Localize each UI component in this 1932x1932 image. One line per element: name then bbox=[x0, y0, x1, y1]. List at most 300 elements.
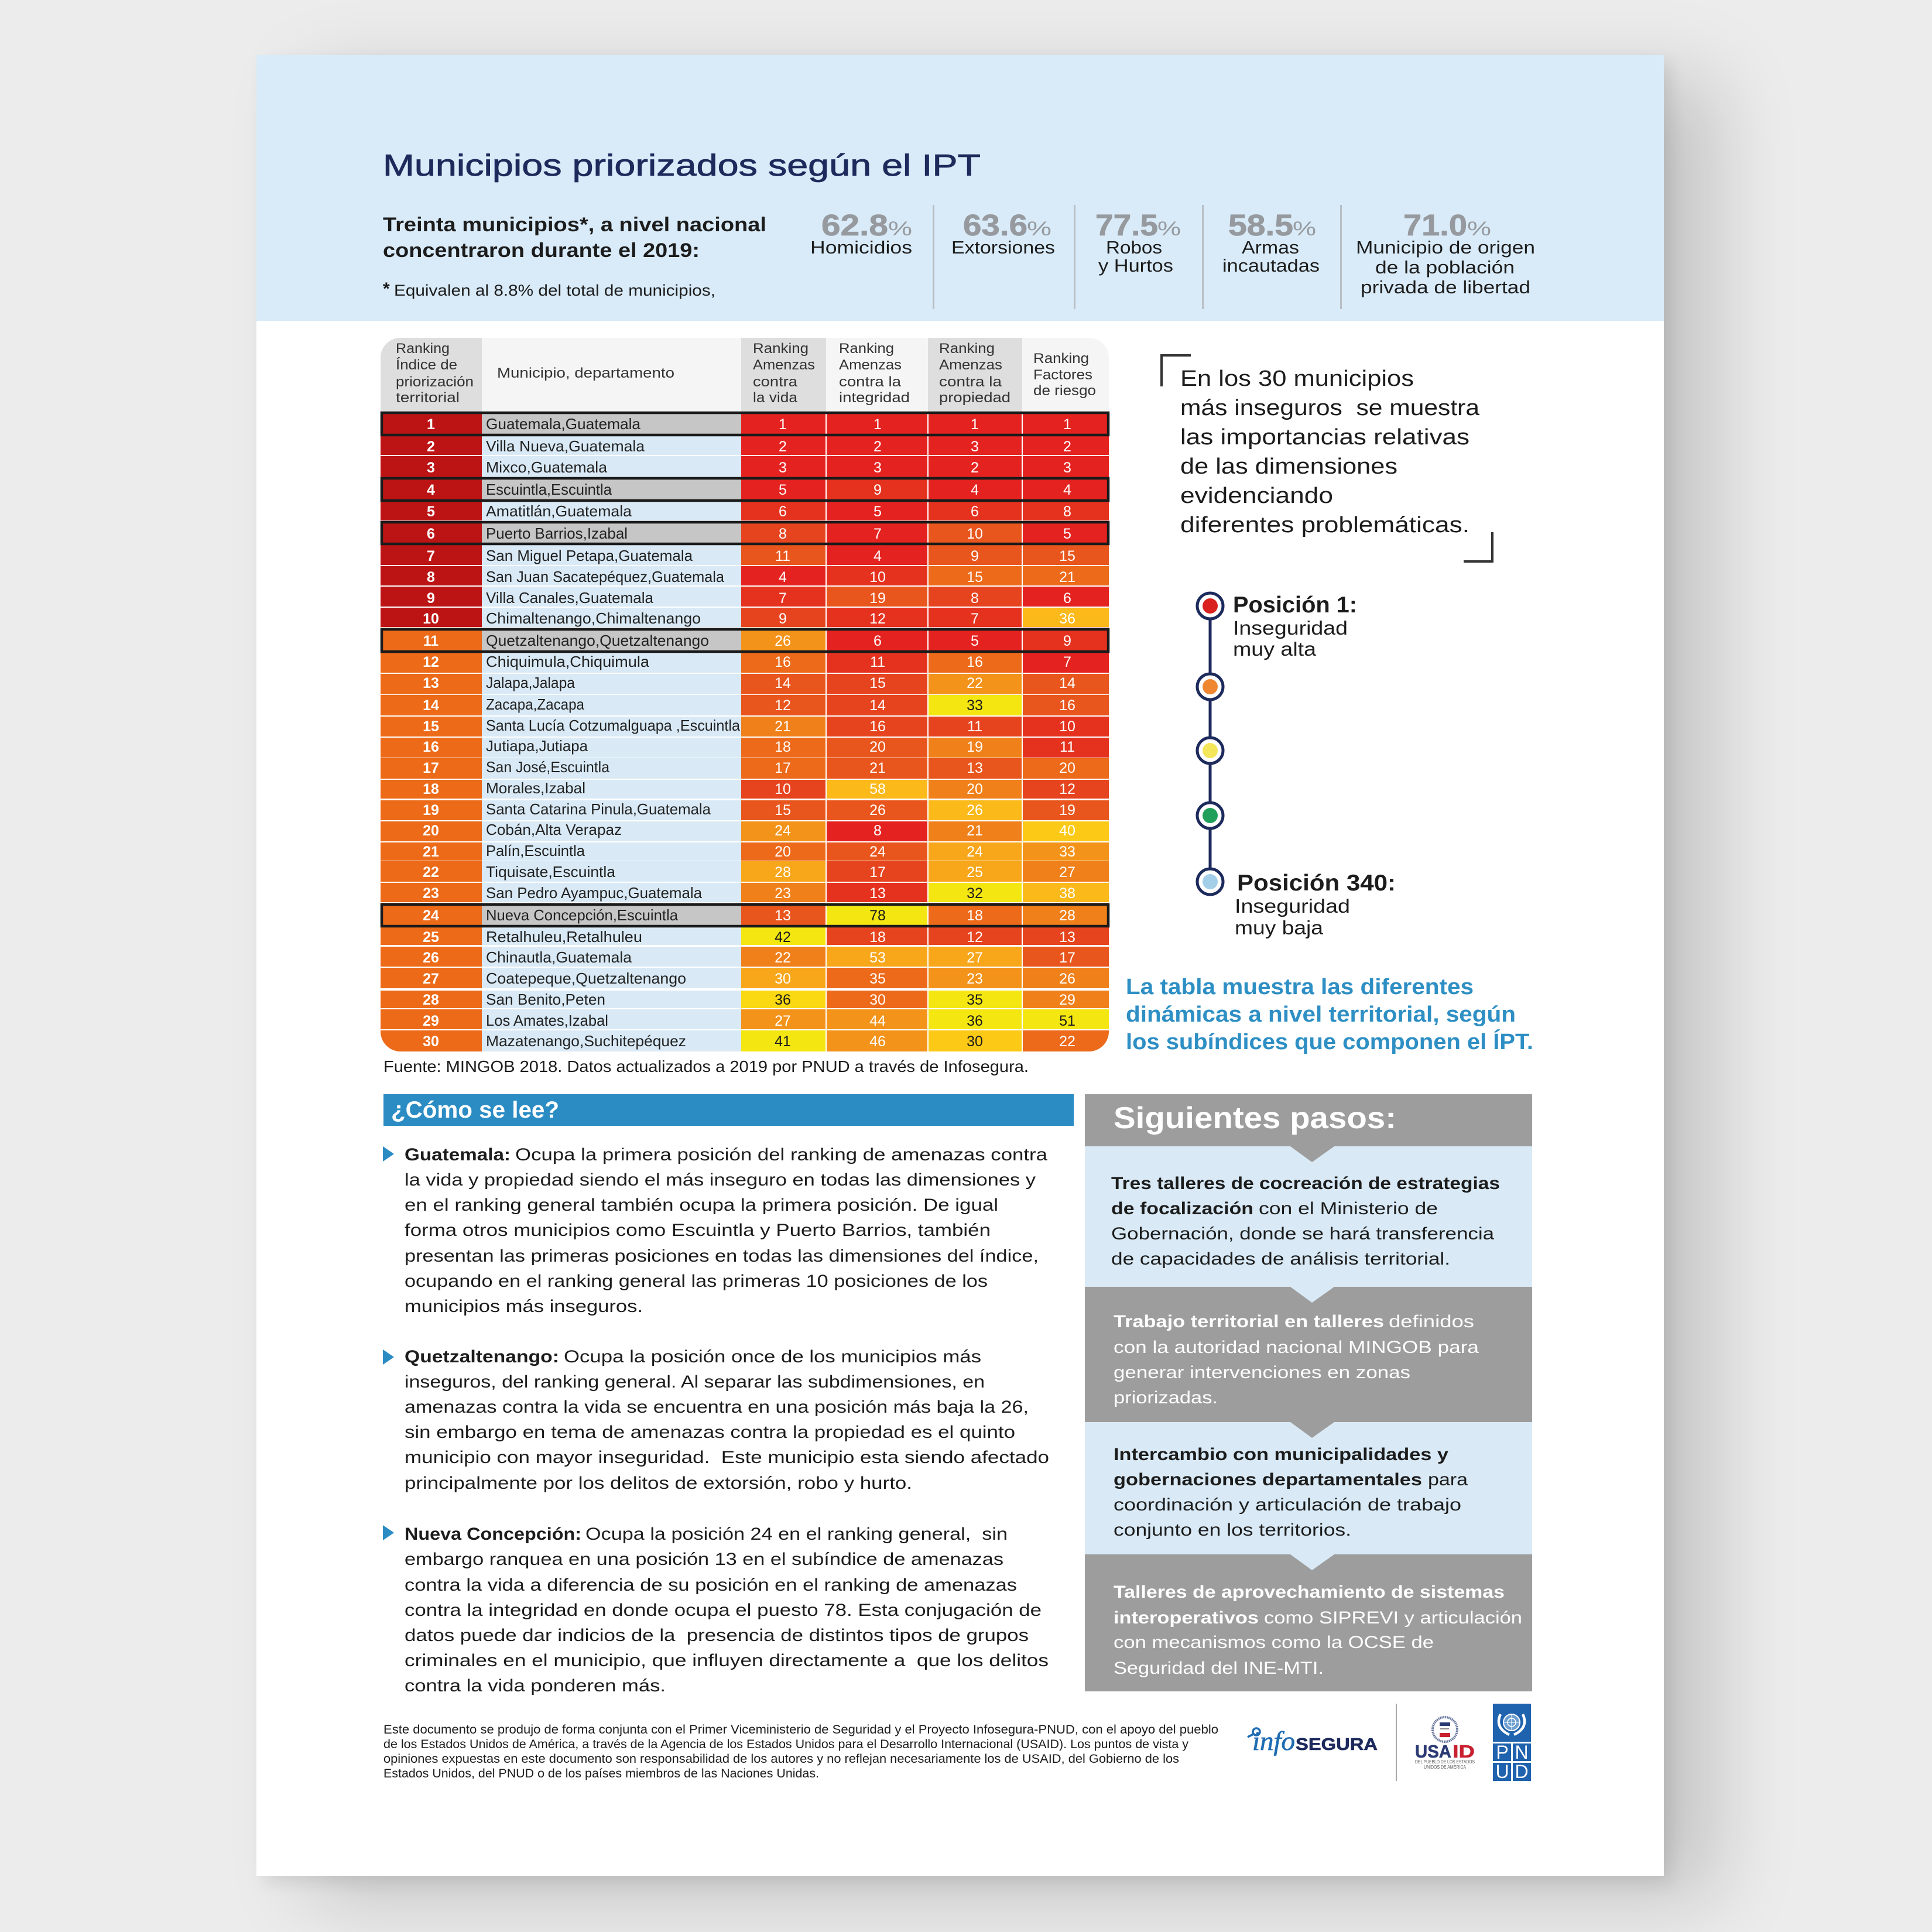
row 26: 17 bbox=[1059, 950, 1075, 966]
stat: armas incautadas: Armas bbox=[1242, 237, 1299, 258]
header panel bbox=[256, 55, 1664, 321]
row 9 bbox=[381, 587, 1109, 607]
row 24: 24 bbox=[423, 907, 439, 924]
intro text: Equivalen al 8.8% del total de municipios, bbox=[394, 282, 715, 299]
marker: green bbox=[1197, 803, 1223, 828]
row 24: 78 bbox=[869, 907, 886, 924]
item: Guatemala: ocupando en el ranking general las primeras 10 posiciones de los bbox=[405, 1272, 988, 1291]
row 15: 15 bbox=[423, 718, 439, 735]
stat: robos y hurtos: y Hurtos bbox=[1098, 255, 1173, 276]
step 1: de capacidades de análisis territorial. bbox=[1111, 1249, 1450, 1269]
item: Nueva Concepcion: Ocupa la posición 24 en el ranking general, sin bbox=[585, 1525, 1008, 1544]
row 12 bbox=[381, 652, 1109, 673]
row 30: 22 bbox=[1059, 1033, 1075, 1050]
row 17 bbox=[381, 758, 1109, 779]
row 21: 33 bbox=[1059, 844, 1075, 860]
row 7: 7 bbox=[427, 548, 435, 564]
title: Municipios priorizados según el IPT bbox=[383, 149, 981, 183]
row 6: 7 bbox=[873, 526, 882, 542]
row 25 bbox=[381, 927, 1109, 946]
row 10 bbox=[381, 608, 1109, 627]
row 29: 29 bbox=[423, 1013, 439, 1029]
row 2: 3 bbox=[971, 439, 979, 455]
note with brackets: las importancias relativas bbox=[1180, 425, 1469, 450]
row 13: 13 bbox=[423, 675, 439, 691]
logo: usaid bbox=[1415, 1717, 1475, 1770]
row 10: 10 bbox=[423, 611, 439, 627]
item: Nueva Concepcion: embargo ranquea en una posición 13 en el subíndice de amenazas bbox=[405, 1550, 1003, 1569]
blue callout: La tabla muestra las diferentes bbox=[1126, 975, 1474, 999]
stat: municipio de origen bbox=[1356, 208, 1535, 297]
item: Guatemala: la vida y propiedad siendo el más inseguro en todas las dimensiones y bbox=[405, 1170, 1036, 1190]
row 15: 11 bbox=[967, 718, 982, 735]
row 26: Chinautla,Guatemala bbox=[486, 948, 632, 966]
row 4: 4 bbox=[1063, 482, 1071, 498]
row 17: 17 bbox=[423, 760, 439, 776]
stat: extorsiones: 63.6 bbox=[963, 208, 1027, 242]
step 3: Intercambio con municipalidades y bbox=[1114, 1445, 1448, 1464]
item: Nueva Concepcion: criminales en el municipio, que influyen directamente a que los delitos bbox=[405, 1651, 1049, 1670]
row 29: 44 bbox=[869, 1013, 886, 1029]
item: Quetzaltenango: principalmente por los delitos de extorsión, robo y hurto. bbox=[405, 1474, 912, 1493]
table header: la vida bbox=[753, 390, 798, 406]
row 18: 58 bbox=[869, 781, 886, 797]
row 19: 19 bbox=[1059, 802, 1075, 818]
note with brackets: más inseguros se muestra bbox=[1180, 396, 1480, 420]
row 10: 9 bbox=[779, 611, 787, 627]
row 12: 7 bbox=[1063, 654, 1071, 670]
row 21: 24 bbox=[869, 844, 886, 860]
row 20: 8 bbox=[873, 823, 882, 839]
stat: armas incautadas: 58.5 bbox=[1228, 208, 1293, 242]
step 4: como SIPREVI y articulación bbox=[1264, 1608, 1522, 1628]
row 18: 18 bbox=[423, 781, 439, 797]
row 15 bbox=[381, 717, 1109, 737]
label: position 340 bbox=[1235, 871, 1396, 938]
step 3 bbox=[1085, 1422, 1532, 1554]
row 26: 53 bbox=[869, 950, 886, 966]
table header: propiedad bbox=[939, 390, 1010, 406]
row 2 bbox=[381, 436, 1109, 455]
intro text bbox=[383, 214, 766, 299]
row 27: 26 bbox=[1059, 971, 1075, 987]
row 11: 6 bbox=[873, 633, 882, 649]
step 4: con mecanismos como la OCSE de bbox=[1114, 1633, 1434, 1652]
item: Quetzaltenango: inseguros, del ranking general. Al separar las subdimensiones, en bbox=[405, 1372, 985, 1392]
row 28: 36 bbox=[775, 992, 791, 1008]
note with brackets: evidenciando bbox=[1180, 484, 1333, 508]
label: position 340: Posición 340: bbox=[1237, 871, 1396, 896]
step 4: Talleres de aprovechamiento de sistemas bbox=[1114, 1582, 1505, 1602]
row 26 bbox=[381, 947, 1109, 967]
row 24: Nueva Concepción,Escuintla bbox=[486, 906, 679, 924]
table header: Ranking bbox=[396, 341, 450, 357]
row 23: 32 bbox=[967, 885, 983, 902]
row 1 bbox=[383, 414, 1107, 434]
row 2: 2 bbox=[427, 439, 435, 455]
row 9: 19 bbox=[869, 590, 886, 607]
logo: pnud: P bbox=[1496, 1742, 1509, 1763]
step 1 bbox=[1085, 1146, 1532, 1287]
step 2: con la autoridad nacional MINGOB para bbox=[1114, 1338, 1479, 1357]
step 1: Gobernación, donde se hará transferencia bbox=[1111, 1224, 1494, 1244]
row 24: 13 bbox=[775, 907, 791, 924]
table header: contra la bbox=[839, 374, 902, 390]
row 25: Retalhuleu,Retalhuleu bbox=[486, 928, 642, 946]
row 5: 5 bbox=[427, 503, 435, 520]
step 4: Seguridad del INE-MTI. bbox=[1114, 1659, 1324, 1678]
step 2: Trabajo territorial en talleres bbox=[1114, 1312, 1384, 1331]
row 20: 21 bbox=[967, 823, 983, 839]
row 23 bbox=[381, 883, 1109, 902]
row 11: 5 bbox=[971, 633, 979, 649]
table header: Ranking bbox=[753, 341, 809, 357]
table header: Amenzas bbox=[839, 357, 902, 373]
panel: como se lee bbox=[383, 1094, 1074, 1695]
row 22 bbox=[381, 861, 1109, 882]
row 5: Amatitlán,Guatemala bbox=[486, 502, 632, 520]
item: Quetzaltenango: Quetzaltenango: bbox=[405, 1347, 559, 1366]
row 30: Mazatenango,Suchitepéquez bbox=[486, 1032, 686, 1050]
row 15: 21 bbox=[775, 718, 791, 735]
item: Quetzaltenango: Ocupa la posición once de los municipios más bbox=[564, 1347, 981, 1366]
row 8: 8 bbox=[427, 569, 435, 585]
step 2: generar intervenciones en zonas bbox=[1114, 1363, 1410, 1382]
row 17: 21 bbox=[869, 760, 886, 776]
label: position 340: Inseguridad bbox=[1235, 895, 1350, 917]
row 28: 35 bbox=[967, 992, 983, 1008]
row 22: 28 bbox=[775, 864, 791, 881]
row 27 bbox=[381, 968, 1109, 988]
row 17: San José,Escuintla bbox=[486, 758, 610, 776]
row 12: 11 bbox=[870, 654, 885, 670]
row 16: Jutiapa,Jutiapa bbox=[486, 737, 588, 755]
row 26: 22 bbox=[775, 950, 791, 966]
item: Guatemala bbox=[383, 1145, 1047, 1316]
table header: contra bbox=[753, 374, 798, 390]
row 7: 11 bbox=[775, 548, 790, 564]
row 5: 6 bbox=[779, 503, 787, 520]
row 9: 9 bbox=[427, 590, 435, 607]
item: Guatemala: presentan las primeras posiciones en todas las dimensiones del índice, bbox=[405, 1246, 1039, 1266]
logo: pnud bbox=[1493, 1704, 1531, 1782]
row 10: 12 bbox=[869, 611, 886, 627]
row 1: 1 bbox=[427, 416, 435, 433]
item: Nueva Concepcion: Nueva Concepción: bbox=[405, 1525, 581, 1544]
row 25: 13 bbox=[1059, 929, 1075, 946]
stat: robos y hurtos: 77.5 bbox=[1095, 208, 1158, 242]
heading bar: ¿Cómo se lee? bbox=[391, 1097, 559, 1123]
table header: Ranking bbox=[839, 341, 894, 357]
stat: municipio de origen: Municipio de origen bbox=[1356, 237, 1535, 258]
row 3 bbox=[381, 456, 1109, 478]
row 25: 18 bbox=[869, 929, 886, 946]
row 28: 30 bbox=[869, 992, 886, 1008]
heading: Siguientes pasos: bbox=[1114, 1101, 1396, 1135]
note with brackets: diferentes problemáticas. bbox=[1180, 513, 1469, 537]
row 29: 36 bbox=[967, 1013, 983, 1029]
step 3: para bbox=[1428, 1470, 1468, 1489]
label: position 1: Posición 1: bbox=[1233, 592, 1357, 618]
item: Guatemala: Guatemala: bbox=[405, 1145, 511, 1164]
row 20: 20 bbox=[423, 823, 439, 839]
page sheet bbox=[256, 55, 1664, 1876]
row 8: 15 bbox=[967, 569, 983, 585]
row 29: Los Amates,Izabal bbox=[486, 1012, 608, 1029]
row 28 bbox=[381, 991, 1109, 1008]
row 18 bbox=[381, 779, 1109, 799]
item: Quetzaltenango bbox=[383, 1347, 1049, 1493]
stat: robos y hurtos: Robos bbox=[1106, 237, 1162, 258]
row 29 bbox=[381, 1009, 1109, 1029]
row 13: 22 bbox=[967, 675, 983, 691]
row 21: 21 bbox=[423, 844, 439, 860]
row 22: 22 bbox=[423, 864, 439, 881]
logo: usaid: ID bbox=[1453, 1741, 1475, 1762]
row 11: Quetzaltenango,Quetzaltenango bbox=[486, 632, 709, 649]
logo: usaid: UNIDOS DE AMÉRICA bbox=[1424, 1765, 1467, 1770]
table header: Municipio, departamento bbox=[497, 365, 674, 381]
row 7 bbox=[381, 544, 1109, 565]
row 14 bbox=[381, 695, 1109, 715]
row 11: 26 bbox=[775, 633, 791, 649]
row 14: 16 bbox=[1059, 697, 1075, 714]
row 28: 28 bbox=[423, 992, 439, 1008]
row 8: San Juan Sacatepéquez,Guatemala bbox=[486, 568, 725, 585]
table header: Amenzas bbox=[753, 357, 815, 373]
row 2: 2 bbox=[873, 439, 882, 455]
row 24: 28 bbox=[1059, 907, 1075, 924]
note with brackets: de las dimensiones bbox=[1180, 454, 1397, 479]
row 15: Santa Lucía Cotzumalguapa ,Escuintla bbox=[486, 717, 741, 734]
legend scale bbox=[1197, 592, 1396, 938]
row 22: 27 bbox=[1059, 864, 1075, 881]
row 18: 10 bbox=[775, 781, 791, 797]
row 9: 7 bbox=[779, 590, 787, 607]
row 21: 24 bbox=[967, 844, 983, 860]
logo: usaid: USA bbox=[1415, 1741, 1451, 1762]
row 30: 30 bbox=[423, 1033, 439, 1050]
row 20: 24 bbox=[775, 823, 791, 839]
row 21: Palín,Escuintla bbox=[486, 842, 585, 859]
row 13: 14 bbox=[1059, 675, 1075, 691]
heading bar bbox=[383, 1094, 1074, 1126]
note with brackets: En los 30 municipios bbox=[1180, 366, 1414, 391]
row 3: 3 bbox=[427, 460, 435, 476]
stat: armas incautadas bbox=[1222, 208, 1320, 276]
table header: integridad bbox=[839, 390, 910, 406]
table header: Factores bbox=[1033, 367, 1092, 383]
table header: territorial bbox=[396, 390, 460, 406]
row 17: 17 bbox=[775, 760, 791, 776]
row 19 bbox=[381, 800, 1109, 820]
row 6: 5 bbox=[1063, 526, 1071, 542]
row 12: 16 bbox=[775, 654, 791, 670]
marker: position 1 red bbox=[1197, 593, 1223, 619]
row 7: 9 bbox=[971, 548, 979, 564]
table header: Índice de bbox=[396, 357, 457, 373]
label: position 340: muy baja bbox=[1235, 917, 1324, 938]
row 2: 2 bbox=[1063, 439, 1071, 455]
row 1: 1 bbox=[873, 416, 882, 433]
stat: homicidios bbox=[810, 208, 912, 258]
stat: armas incautadas: incautadas bbox=[1222, 255, 1320, 276]
row 13 bbox=[381, 674, 1109, 694]
row 22: Tiquisate,Escuintla bbox=[486, 863, 616, 881]
intro text: concentraron durante el 2019: bbox=[383, 239, 700, 262]
row 14: Zacapa,Zacapa bbox=[486, 696, 584, 713]
row 21: 20 bbox=[775, 844, 791, 860]
label: position 1: Inseguridad bbox=[1233, 617, 1348, 639]
note with brackets bbox=[1162, 355, 1492, 561]
row 24 bbox=[381, 903, 1109, 927]
intro text: Treinta municipios*, a nivel nacional bbox=[383, 214, 766, 236]
row 6: Puerto Barrios,Izabal bbox=[486, 525, 628, 542]
row 3: 2 bbox=[971, 460, 979, 476]
row 3: 3 bbox=[873, 460, 882, 476]
label: position 1 bbox=[1233, 592, 1357, 660]
stat: homicidios: Homicidios bbox=[810, 237, 912, 258]
logo: usaid: DEL PUEBLO DE LOS ESTADOS bbox=[1415, 1759, 1475, 1765]
row 23: 13 bbox=[869, 885, 886, 902]
row 6: 6 bbox=[427, 526, 435, 542]
disclaimer text: de los Estados Unidos de América, a través de la Agencia de los Estados Unidos para el Desarrollo Internacional (USAID). Los puntos de vista y bbox=[383, 1738, 1188, 1751]
stat: armas incautadas: % bbox=[1293, 218, 1316, 240]
row 16: 19 bbox=[967, 739, 983, 755]
item: Quetzaltenango: sin embargo en tema de amenazas contra la propiedad es el quinto bbox=[405, 1423, 1015, 1442]
row 8: 21 bbox=[1059, 569, 1075, 585]
row 30: 41 bbox=[775, 1033, 791, 1050]
row 8 bbox=[381, 566, 1109, 585]
row 27: 23 bbox=[967, 971, 983, 987]
item: Guatemala: forma otros municipios como Escuintla y Puerto Barrios, también bbox=[405, 1221, 991, 1240]
blue callout: dinámicas a nivel territorial, según bbox=[1126, 1002, 1516, 1027]
step 1: de focalización bbox=[1111, 1199, 1253, 1218]
item: Quetzaltenango: municipio con mayor inseguridad. Este municipio esta siendo afectado bbox=[405, 1448, 1049, 1467]
row 14: 12 bbox=[775, 697, 791, 714]
row 17: 13 bbox=[967, 760, 983, 776]
row 20: Cobán,Alta Verapaz bbox=[486, 821, 622, 838]
blue callout: los subíndices que componen el ÍPT. bbox=[1126, 1029, 1533, 1054]
row 19: 15 bbox=[775, 802, 791, 818]
item: Nueva Concepcion: contra la integridad en donde ocupa el puesto 78. Esta conjugación de bbox=[405, 1601, 1042, 1620]
row 23: 23 bbox=[775, 885, 791, 902]
stat: extorsiones: Extorsiones bbox=[951, 237, 1055, 258]
row 17: 20 bbox=[1059, 760, 1075, 776]
table header: Ranking bbox=[939, 341, 995, 357]
row 1: 1 bbox=[1063, 416, 1071, 433]
row 28: 29 bbox=[1059, 992, 1075, 1008]
row 16 bbox=[381, 737, 1109, 758]
row 29: 51 bbox=[1059, 1013, 1075, 1029]
item: Nueva Concepcion: contra la vida ponderen más. bbox=[405, 1676, 666, 1695]
row 11 bbox=[381, 628, 1109, 652]
row 9: 6 bbox=[1063, 590, 1071, 607]
row 4: 9 bbox=[873, 482, 882, 498]
row 27: Coatepeque,Quetzaltenango bbox=[486, 970, 686, 987]
table header bbox=[381, 338, 1109, 412]
disclaimer text: opiniones expuestas en este documento son responsabilidad de los autores y no reflejan necesariamente los de USAID, del Gobierno de los bbox=[383, 1752, 1179, 1766]
row 12: Chiquimula,Chiquimula bbox=[486, 653, 650, 670]
row 5 bbox=[381, 501, 1109, 520]
row 19: 19 bbox=[423, 802, 439, 818]
row 1: 1 bbox=[779, 416, 787, 433]
step 2 bbox=[1085, 1287, 1532, 1422]
row 25: 25 bbox=[423, 929, 439, 946]
row 8: 4 bbox=[779, 569, 787, 585]
step 3: gobernaciones departamentales bbox=[1114, 1470, 1422, 1489]
stat: municipio de origen: 71.0 bbox=[1403, 208, 1467, 242]
table rows and header bbox=[381, 338, 1109, 1051]
row 23: 38 bbox=[1059, 885, 1075, 902]
row 22: 25 bbox=[967, 864, 983, 881]
blue callout bbox=[1126, 975, 1533, 1054]
row 5: 6 bbox=[971, 503, 979, 520]
step 4 bbox=[1085, 1554, 1532, 1691]
stat: robos y hurtos bbox=[1095, 208, 1181, 276]
item: Nueva Concepcion bbox=[383, 1525, 1049, 1695]
row 6: 10 bbox=[967, 526, 983, 542]
item: Guatemala: Ocupa la primera posición del ranking de amenazas contra bbox=[515, 1145, 1047, 1164]
logo: infosegura: info bbox=[1252, 1726, 1295, 1756]
row 18: 12 bbox=[1059, 781, 1075, 797]
row 3: 3 bbox=[779, 460, 787, 476]
item: Guatemala: en el ranking general también ocupa la primera posición. De igual bbox=[405, 1195, 998, 1215]
row 25: 42 bbox=[775, 929, 791, 946]
row 15: 16 bbox=[869, 718, 886, 735]
logo: infosegura bbox=[1248, 1726, 1378, 1756]
row 4: 4 bbox=[971, 482, 979, 498]
row 4: 4 bbox=[427, 482, 435, 498]
row 7: 15 bbox=[1059, 548, 1075, 564]
stat: robos y hurtos: % bbox=[1157, 218, 1181, 240]
table header: Amenzas bbox=[939, 357, 1002, 373]
ranking table bbox=[381, 338, 1109, 1051]
row 30: 30 bbox=[967, 1033, 983, 1050]
row 30: 46 bbox=[869, 1033, 886, 1050]
row 3: 3 bbox=[1063, 460, 1071, 476]
row 16: 11 bbox=[1060, 739, 1075, 755]
row 11: 11 bbox=[423, 633, 439, 649]
heading bbox=[1085, 1094, 1532, 1146]
row 19: Santa Catarina Pinula,Guatemala bbox=[486, 800, 711, 818]
table source note: Fuente: MINGOB 2018. Datos actualizados a 2019 por PNUD a través de Infosegura. bbox=[383, 1057, 1029, 1075]
logo: pnud: N bbox=[1515, 1742, 1529, 1763]
row 26: 26 bbox=[423, 950, 439, 966]
row 5: 5 bbox=[873, 503, 882, 520]
logo: pnud: D bbox=[1515, 1761, 1529, 1782]
table header: de riesgo bbox=[1033, 383, 1096, 399]
step 3: conjunto en los territorios. bbox=[1114, 1520, 1351, 1540]
row 5: 8 bbox=[1063, 503, 1071, 520]
row 6: 8 bbox=[779, 526, 787, 542]
highlighted row outlines bbox=[382, 413, 1108, 926]
item: Nueva Concepcion: contra la vida a diferencia de su posición en el ranking de amenazas bbox=[405, 1575, 1017, 1595]
disclaimer text: Estados Unidos, del PNUD o de los países miembros de las Naciones Unidas. bbox=[383, 1767, 819, 1780]
row 16: 16 bbox=[423, 739, 439, 755]
stat: municipio de origen: de la población bbox=[1375, 257, 1515, 278]
table header: priorización bbox=[396, 374, 474, 390]
logo: pnud: U bbox=[1495, 1761, 1509, 1782]
row 8: 10 bbox=[869, 569, 886, 585]
marker: yellow bbox=[1197, 738, 1223, 763]
row 22: 17 bbox=[869, 864, 886, 881]
row 13: Jalapa,Jalapa bbox=[486, 674, 575, 691]
row 2: Villa Nueva,Guatemala bbox=[486, 437, 645, 455]
row 18: Morales,Izabal bbox=[486, 779, 585, 797]
row 10: Chimaltenango,Chimaltenango bbox=[486, 609, 701, 627]
panel: siguientes pasos bbox=[1085, 1094, 1532, 1691]
